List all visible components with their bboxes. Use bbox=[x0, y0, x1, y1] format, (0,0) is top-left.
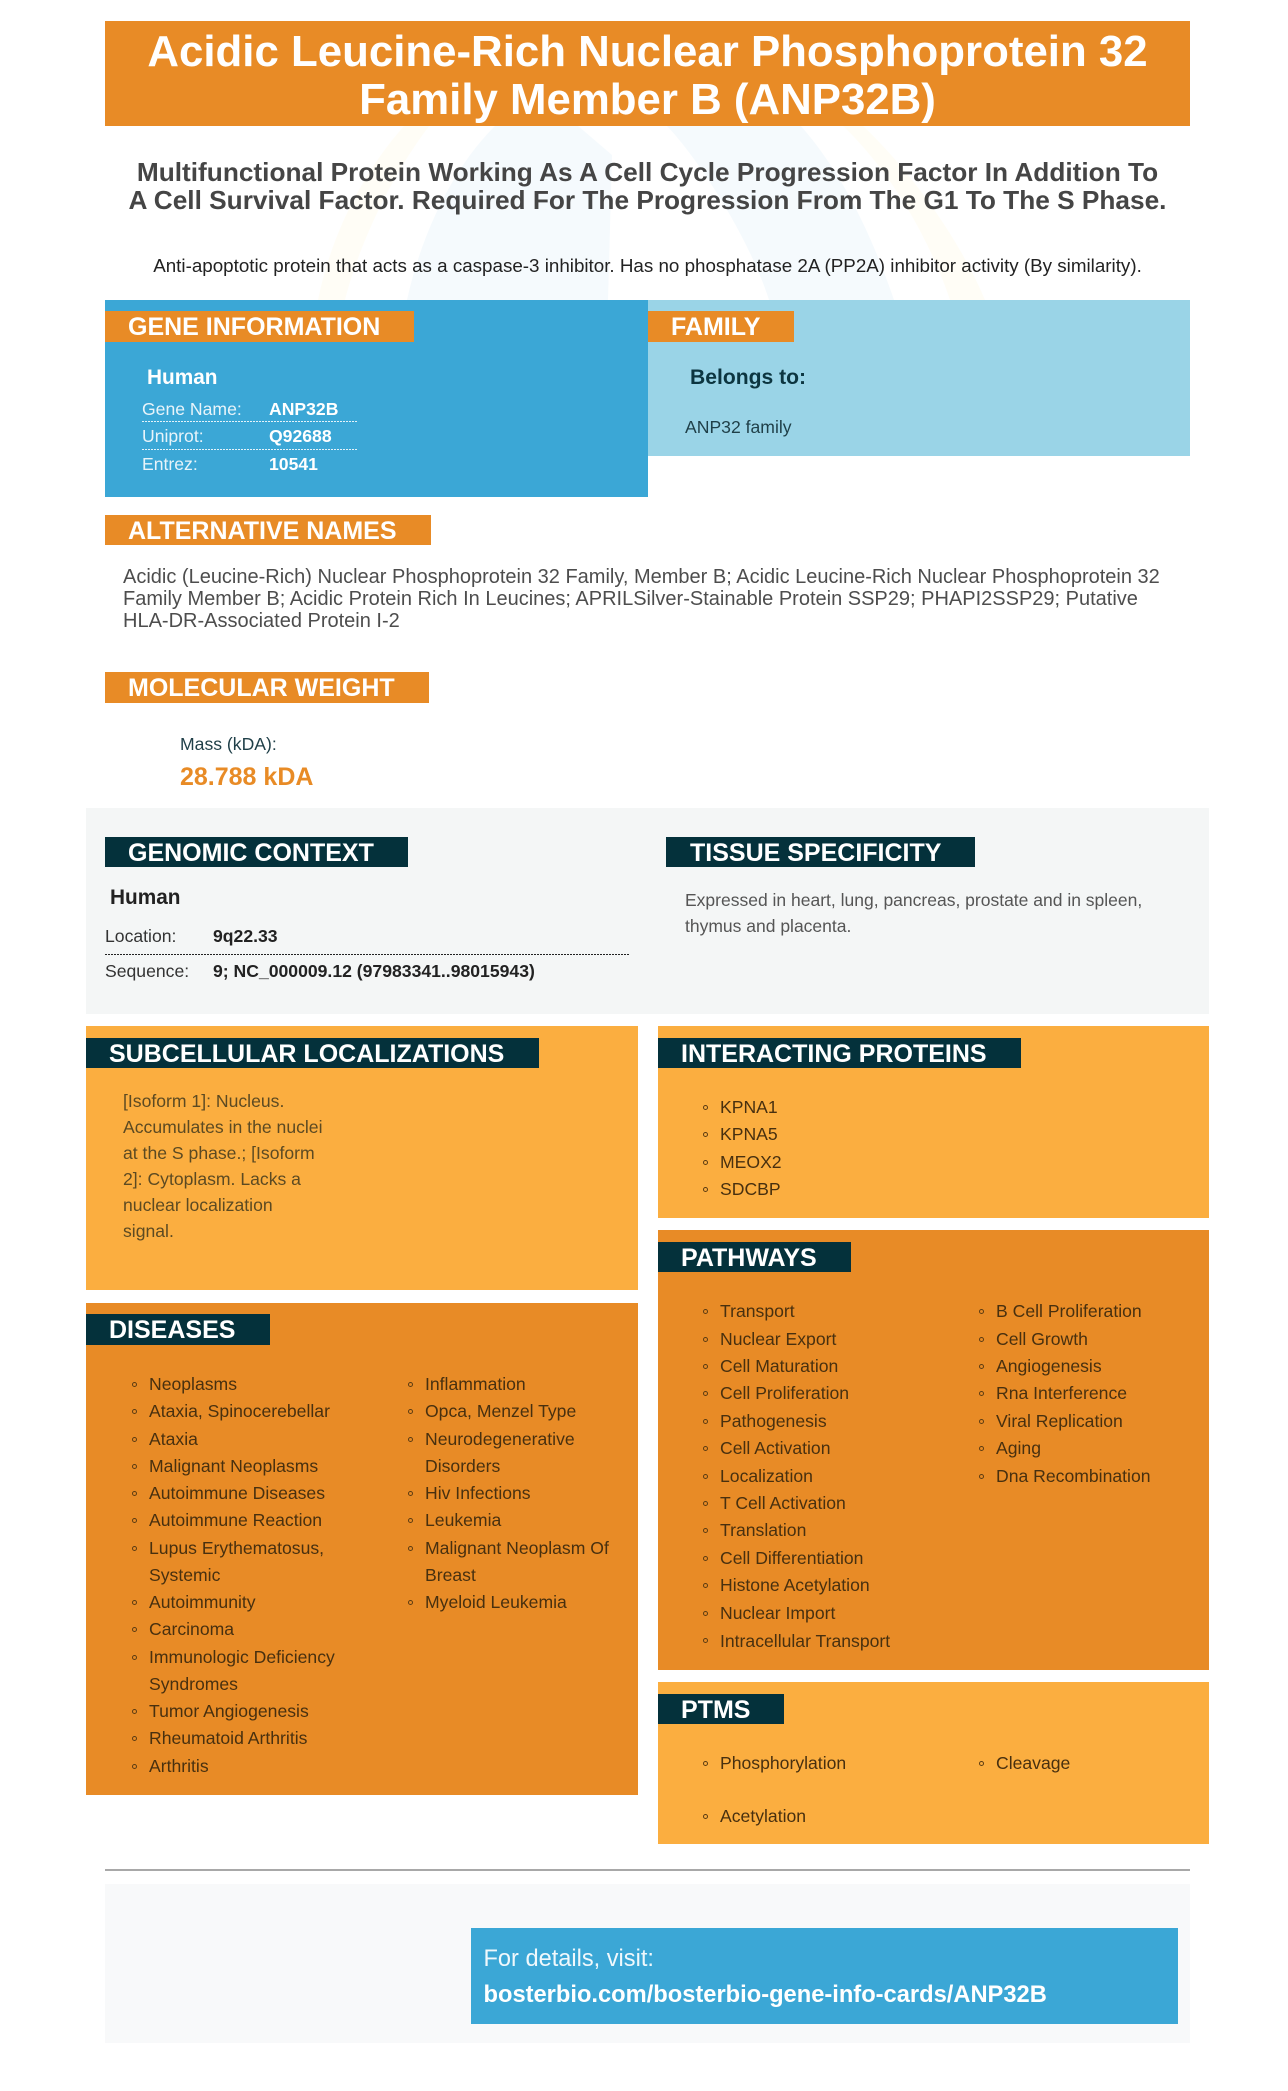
entrez row: Entrez: bbox=[142, 454, 198, 474]
diseases list column 2: Disorders bbox=[425, 1456, 500, 1476]
diseases list column 2: Malignant Neoplasm Of bbox=[425, 1538, 609, 1558]
pathways list column 1: Histone Acetylation bbox=[720, 1575, 870, 1595]
uniprot row: Uniprot: bbox=[142, 426, 204, 446]
alternative names text: Family Member B; Acidic Protein Rich In Leucines; APRILSilver-Stainable Protein SSP29; PHAPI2SSP29; Putative bbox=[123, 588, 1138, 610]
gene name row bbox=[142, 397, 357, 422]
diseases list column 2: Leukemia bbox=[425, 1510, 501, 1530]
heading: pathways bbox=[658, 1242, 851, 1272]
sequence row bbox=[105, 961, 535, 981]
species: Human bbox=[110, 886, 180, 909]
localization text: 2]: Cytoplasm. Lacks a bbox=[123, 1169, 301, 1189]
protein list: SDCBP bbox=[720, 1179, 781, 1199]
location row bbox=[105, 925, 629, 955]
diseases list column 1: Systemic bbox=[149, 1565, 220, 1585]
entrez row bbox=[142, 454, 318, 474]
diseases list column 1: Syndromes bbox=[149, 1674, 238, 1694]
panel: interacting proteins bbox=[658, 1026, 1209, 1218]
pathways list column 2: Aging bbox=[996, 1438, 1041, 1458]
diseases list column 2: Opca, Menzel Type bbox=[425, 1401, 576, 1421]
heading: tissue specificity: TISSUE SPECIFICITY bbox=[690, 839, 941, 867]
localization text: [Isoform 1]: Nucleus. bbox=[123, 1091, 284, 1111]
alternative names text bbox=[123, 566, 1160, 632]
gene name row: ANP32B bbox=[269, 399, 338, 419]
panel: ptms bbox=[658, 1682, 1209, 1844]
diseases list column 1: Carcinoma bbox=[149, 1619, 234, 1639]
diseases list column 2: Breast bbox=[425, 1565, 476, 1585]
panel: gene information bbox=[105, 300, 648, 497]
localization text: at the S phase.; [Isoform bbox=[123, 1143, 315, 1163]
panel: diseases bbox=[86, 1303, 638, 1795]
diseases list column 1: Malignant Neoplasms bbox=[149, 1456, 318, 1476]
pathways list column 1: Translation bbox=[720, 1520, 806, 1540]
title bbox=[147, 27, 1148, 124]
pathways list column 2: Rna Interference bbox=[996, 1383, 1127, 1403]
family value: ANP32 family bbox=[685, 417, 792, 437]
heading: diseases bbox=[86, 1314, 270, 1345]
pathways list column 1: Intracellular Transport bbox=[720, 1631, 890, 1651]
title: Acidic Leucine-Rich Nuclear Phosphoprotein 32 bbox=[147, 27, 1148, 76]
panel: genomic context and tissue specificity: 9; NC_000009.12 (97983341..98015943) bbox=[213, 961, 535, 981]
diseases list column 2: Hiv Infections bbox=[425, 1483, 531, 1503]
heading: diseases: DISEASES bbox=[109, 1316, 235, 1344]
diseases list column 2: Neurodegenerative bbox=[425, 1428, 575, 1448]
uniprot row bbox=[142, 424, 357, 450]
diseases list column 1: Ataxia, Spinocerebellar bbox=[149, 1401, 330, 1421]
heading: gene information: GENE INFORMATION bbox=[128, 313, 380, 341]
subtitle: A Cell Survival Factor. Required For The Progression From The G1 To The S Phase. bbox=[129, 185, 1166, 215]
uniprot row: Q92688 bbox=[269, 426, 332, 446]
heading: molecular weight: MOLECULAR WEIGHT bbox=[128, 674, 395, 702]
pathways list column 1: Cell Proliferation bbox=[720, 1383, 849, 1403]
heading: subcellular localizations: SUBCELLULAR LOCALIZATIONS bbox=[109, 1040, 504, 1068]
heading: ptms bbox=[658, 1694, 784, 1724]
diseases list column 2: Myeloid Leukemia bbox=[425, 1592, 567, 1612]
callout: details link bbox=[471, 1928, 1178, 2024]
diseases list column 1: Autoimmune Diseases bbox=[149, 1483, 325, 1503]
pathways list column 1: Nuclear Import bbox=[720, 1603, 835, 1623]
pathways list column 2: Dna Recombination bbox=[996, 1466, 1151, 1486]
heading: family bbox=[648, 311, 794, 342]
heading: pathways: PATHWAYS bbox=[681, 1244, 817, 1272]
heading: ptms: PTMS bbox=[681, 1696, 750, 1724]
diseases list column 1: Arthritis bbox=[149, 1756, 209, 1776]
pathways list column 1: Transport bbox=[720, 1301, 795, 1321]
pathways list column 1: Cell Differentiation bbox=[720, 1548, 863, 1568]
sequence row: Sequence: bbox=[105, 961, 189, 981]
ptm acetylation: Acetylation bbox=[720, 1806, 806, 1826]
localization text bbox=[123, 1091, 323, 1241]
callout url: bosterbio.com/bosterbio-gene-info-cards/ANP32B bbox=[484, 1982, 1047, 2008]
entrez row: 10541 bbox=[269, 454, 318, 474]
pathways list column 1: Cell Maturation bbox=[720, 1356, 838, 1376]
diseases list column 1: Autoimmunity bbox=[149, 1592, 256, 1612]
protein list bbox=[703, 1097, 782, 1199]
subtitle: Multifunctional Protein Working As A Cell Cycle Progression Factor In Addition To bbox=[137, 157, 1158, 187]
diseases list column 1: Neoplasms bbox=[149, 1374, 237, 1394]
diseases list column 1: Autoimmune Reaction bbox=[149, 1510, 322, 1530]
gene name row: Gene Name: bbox=[142, 399, 242, 419]
diseases list column 1 bbox=[132, 1374, 335, 1776]
protein list: MEOX2 bbox=[720, 1152, 782, 1172]
footer divider bbox=[105, 1869, 1190, 1871]
pathways list column 1: Cell Activation bbox=[720, 1438, 831, 1458]
panel: subcellular localizations bbox=[86, 1026, 638, 1290]
localization text: nuclear localization bbox=[123, 1195, 273, 1215]
subtitle bbox=[129, 157, 1166, 215]
tissue specificity text: thymus and placenta. bbox=[685, 916, 851, 936]
diseases list column 1: Tumor Angiogenesis bbox=[149, 1701, 309, 1721]
diseases list column 2: Inflammation bbox=[425, 1374, 526, 1394]
title banner bbox=[105, 21, 1190, 126]
alternative names text: Acidic (Leucine-Rich) Nuclear Phosphoprotein 32 Family, Member B; Acidic Leucine-Rich Nuclear Phosphoprotein 32 bbox=[123, 566, 1160, 588]
mass value: 28.788 kDA bbox=[180, 763, 313, 791]
diseases list column 1: Rheumatoid Arthritis bbox=[149, 1728, 307, 1748]
location row: Location: bbox=[105, 926, 176, 946]
belongs to label: Belongs to: bbox=[690, 366, 806, 389]
ptm cleavage: Cleavage bbox=[996, 1753, 1070, 1773]
pathways list column 2: Viral Replication bbox=[996, 1411, 1123, 1431]
ptm phosphorylation: Phosphorylation bbox=[720, 1753, 846, 1773]
location row: 9q22.33 bbox=[213, 926, 278, 946]
localization text: signal. bbox=[123, 1221, 174, 1241]
panel: pathways bbox=[658, 1230, 1209, 1670]
pathways list column 2: B Cell Proliferation bbox=[996, 1301, 1142, 1321]
localization text: Accumulates in the nuclei bbox=[123, 1117, 323, 1137]
pathways list column 1: Nuclear Export bbox=[720, 1328, 836, 1348]
heading: alternative names: ALTERNATIVE NAMES bbox=[128, 517, 397, 545]
panel: family bbox=[648, 300, 1190, 456]
diseases list column 1: Ataxia bbox=[149, 1428, 198, 1448]
panel: footer bbox=[105, 1884, 1190, 2043]
protein list: KPNA5 bbox=[720, 1124, 778, 1144]
diseases list column 2 bbox=[408, 1374, 609, 1612]
diseases list column 1: Lupus Erythematosus, bbox=[149, 1538, 324, 1558]
protein list: KPNA1 bbox=[720, 1097, 778, 1117]
diseases list column 1: Immunologic Deficiency bbox=[149, 1646, 335, 1666]
description: Anti-apoptotic protein that acts as a caspase-3 inhibitor. Has no phosphatase 2A (PP2A) inhibitor activity (By similarity). bbox=[153, 255, 1142, 276]
pathways list column 1 bbox=[703, 1301, 890, 1651]
callout label: For details, visit: bbox=[484, 1946, 654, 1972]
panel: genomic context and tissue specificity bbox=[86, 808, 1209, 1014]
pathways list column 2 bbox=[979, 1301, 1151, 1486]
heading: genomic context: GENOMIC CONTEXT bbox=[128, 839, 374, 867]
pathways list column 2: Cell Growth bbox=[996, 1328, 1088, 1348]
tissue specificity text: Expressed in heart, lung, pancreas, prostate and in spleen, bbox=[685, 890, 1142, 910]
tissue specificity text bbox=[685, 890, 1142, 936]
mass label: Mass (kDA): bbox=[180, 734, 277, 754]
watermark bbox=[318, 126, 984, 300]
pathways list column 1: Localization bbox=[720, 1466, 813, 1486]
title: Family Member B (ANP32B) bbox=[359, 75, 936, 124]
alternative names text: HLA-DR-Associated Protein I-2 bbox=[123, 610, 400, 632]
pathways list column 2: Angiogenesis bbox=[996, 1356, 1102, 1376]
species: Human bbox=[147, 366, 217, 389]
heading: family: FAMILY bbox=[671, 313, 760, 341]
heading: interacting proteins: INTERACTING PROTEINS bbox=[681, 1040, 987, 1068]
pathways list column 1: T Cell Activation bbox=[720, 1493, 846, 1513]
pathways list column 1: Pathogenesis bbox=[720, 1411, 827, 1431]
